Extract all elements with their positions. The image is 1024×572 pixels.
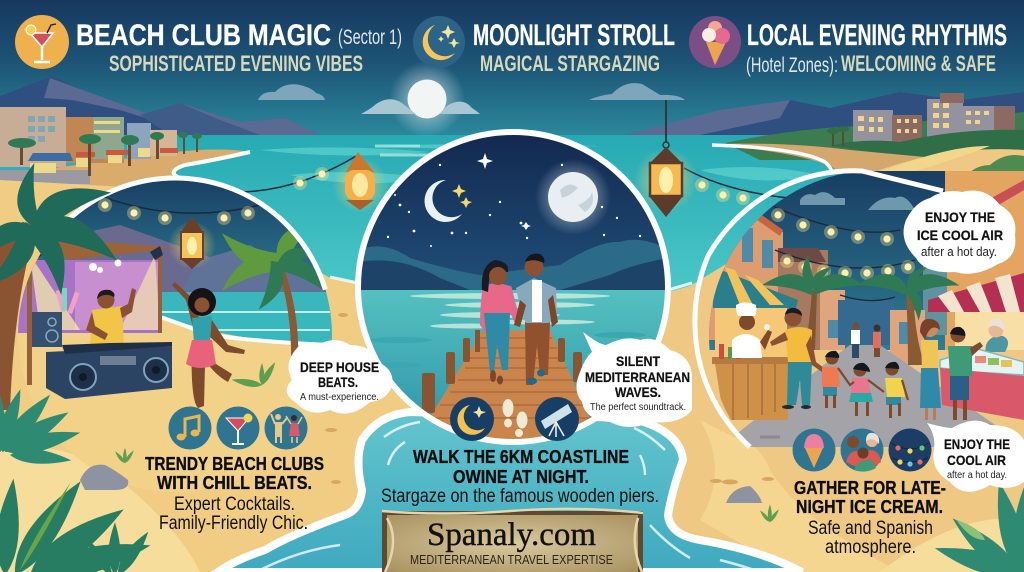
icon: music note (168, 406, 212, 450)
text block: late-night ice cream: NIGHT ICE CREAM. (796, 496, 943, 517)
right hotels and coast (712, 93, 1024, 172)
callout: enjoy the cool air: ENJOY THE (944, 436, 1010, 452)
text block: coastline walk: Stargaze on the famous wooden piers. (381, 486, 659, 507)
text block: late-night ice cream (794, 477, 946, 558)
callout: silent mediterranean waves (576, 332, 692, 427)
clouds (258, 83, 685, 114)
string lights (98, 196, 260, 225)
callout: deep house beats: BEATS. (318, 374, 358, 390)
father with kids (770, 308, 908, 418)
dancer (172, 282, 245, 408)
text block: coastline walk: WALK THE 6KM COASTLINE (413, 446, 629, 467)
text block: beach clubs: Expert Cocktails. (174, 494, 295, 515)
callout: enjoy the ice cool air (904, 191, 1015, 274)
left lantern and string (242, 152, 388, 213)
header: local evening rhythms (689, 16, 1007, 77)
callout: deep house beats: DEEP HOUSE (300, 359, 379, 375)
DJ (86, 288, 136, 346)
text block: beach clubs: WITH CHILL BEATS. (157, 472, 312, 493)
icon: string lights (888, 428, 932, 472)
moon in sky (389, 61, 465, 137)
left town and beach (0, 107, 250, 200)
string lights (770, 205, 915, 301)
water channel (218, 412, 802, 572)
right palm (222, 230, 326, 356)
stars (387, 153, 641, 247)
text block: coastline walk: OWINE AT NIGHT. (453, 466, 589, 487)
lantern (168, 216, 216, 269)
left big palm (0, 163, 123, 410)
callout: enjoy the cool air: after a hot day. (947, 470, 1007, 481)
icon: cocktail (15, 15, 69, 69)
icon: footprints (502, 399, 528, 437)
callout: enjoy the ice cool air: ENJOY THE (925, 209, 995, 225)
icon: cocktail glass (216, 406, 260, 450)
icons: evening row (792, 428, 932, 472)
full moon (537, 161, 609, 233)
panel: evening street scene (690, 170, 1024, 450)
icon: ice cream (792, 428, 836, 472)
logo sign: Spanaly.com: MEDITERRANEAN TRAVEL EXPERTISE (410, 553, 613, 567)
header: local evening rhythms: (Hotel Zones): (746, 54, 838, 77)
logo sign: Spanaly.com (382, 509, 643, 572)
tropical plants (0, 360, 1024, 572)
panel: moonlight pier scene (350, 130, 680, 445)
icon: ice cream cone (689, 16, 741, 68)
icon: crescent and stars (450, 397, 494, 441)
wooden pier (416, 330, 600, 440)
callout: enjoy the cool air: COOL AIR (947, 452, 1006, 468)
woman and boy (920, 319, 983, 420)
text block: beach clubs: TRENDY BEACH CLUBS (145, 453, 324, 474)
ice cream stall left (712, 267, 798, 420)
header: beach club magic (15, 15, 402, 76)
street palms (762, 254, 959, 365)
text block: late-night ice cream: GATHER FOR LATE- (794, 477, 946, 498)
icons: moonlight row (450, 397, 579, 441)
background landscape (0, 0, 1024, 310)
header: moonlight stroll (413, 16, 675, 76)
distant people (851, 322, 881, 358)
header: beach club magic: BEACH CLUB MAGIC (76, 19, 331, 52)
text block: late-night ice cream: atmosphere. (825, 537, 916, 558)
callout: silent mediterranean waves: WAVES. (615, 384, 661, 400)
icon: family (840, 428, 884, 472)
header: beach club magic: SOPHISTICATED EVENING VIBES (109, 51, 363, 76)
text block: late-night ice cream: Safe and Spanish (808, 518, 933, 539)
header: moonlight stroll: MOONLIGHT STROLL (473, 19, 675, 52)
crescent moon (425, 180, 462, 222)
callout: silent mediterranean waves: The perfect soundtrack. (590, 402, 686, 413)
DJ booth (14, 237, 175, 399)
logo sign: Spanaly.com: Spanaly.com (427, 517, 596, 553)
couple (480, 254, 558, 385)
callout: silent mediterranean waves: SILENT (616, 353, 660, 369)
callout: enjoy the ice cool air: after a hot day. (921, 244, 997, 259)
gelato counter (928, 273, 1024, 420)
panel: beach club scene (18, 176, 332, 467)
right lantern and string (634, 100, 870, 217)
callout: deep house beats: A must-experience. (300, 392, 379, 403)
icon: crescent moon (413, 16, 465, 68)
text block: coastline walk (381, 446, 659, 507)
text block: beach clubs (145, 453, 324, 534)
header: moonlight stroll: MAGICAL STARGAZING (480, 51, 660, 76)
main sand (0, 146, 1024, 572)
callout: deep house beats (287, 340, 392, 414)
icon: telescope (535, 397, 579, 441)
callout: silent mediterranean waves: MEDITERRANEAN (585, 369, 690, 385)
icons: beach club row (168, 406, 308, 450)
header: beach club magic: (Sector 1) (338, 26, 402, 49)
text block: beach clubs: Family-Friendly Chic. (159, 513, 308, 534)
chef (732, 302, 772, 358)
callout: enjoy the ice cool air: ICE COOL AIR (917, 227, 1003, 243)
icon: dancers (264, 406, 308, 450)
callout: enjoy the cool air (927, 421, 1024, 492)
